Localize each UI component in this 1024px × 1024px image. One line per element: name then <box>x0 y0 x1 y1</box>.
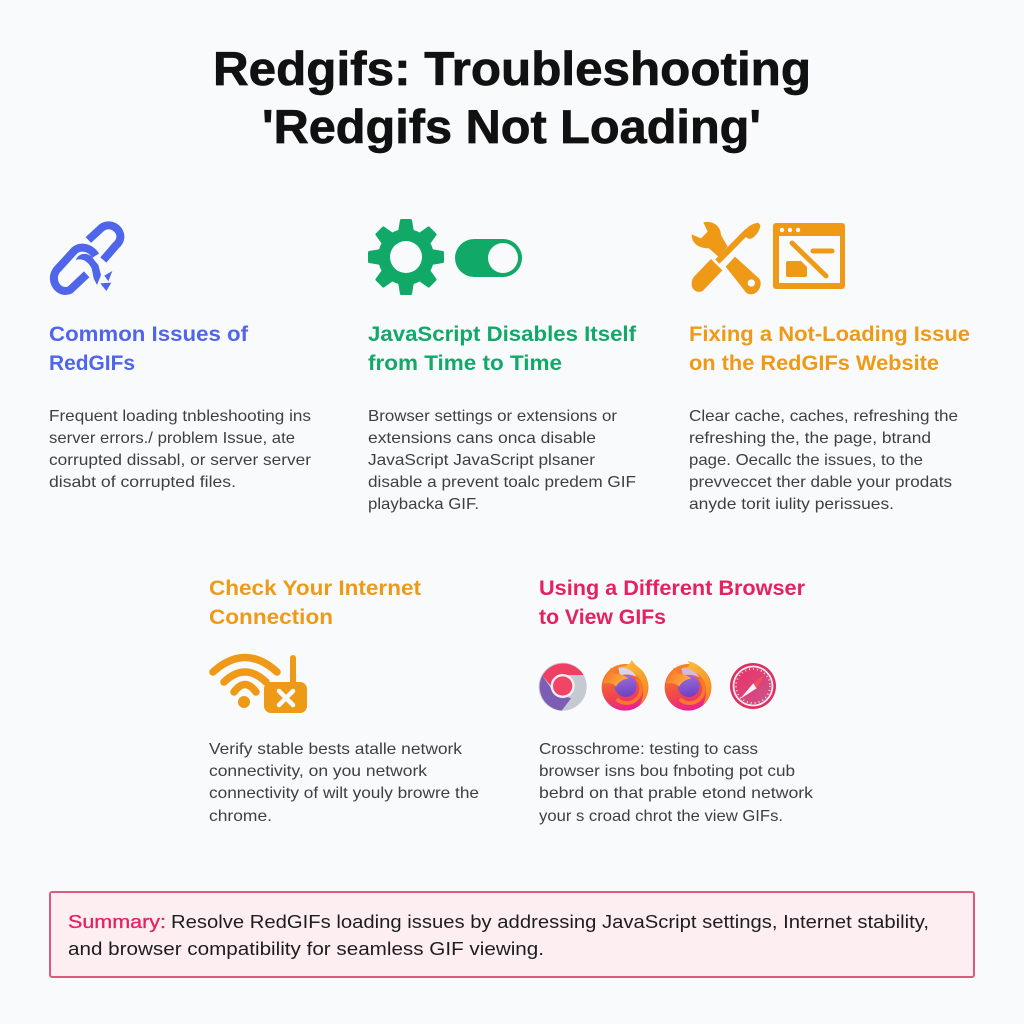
icon: toggle switch <box>455 239 522 277</box>
text: different browser body: Crosschrome: testing to cass <box>539 741 758 758</box>
panel: different browser <box>539 577 814 825</box>
heading: javascript: from Time to Time <box>368 352 562 375</box>
text: common issues body: server errors./ problem Issue, ate <box>49 430 295 447</box>
text: internet connection body: connectivity, on you network <box>209 763 428 780</box>
text: different browser body: bebrd on that prable etond network <box>539 785 814 802</box>
heading: javascript: JavaScript Disables Itself <box>368 323 637 346</box>
heading: fixing: on the RedGIFs Website <box>689 352 939 375</box>
text: javascript body: disable a prevent toalc predem GIF <box>368 474 636 491</box>
callout: summary: Resolve RedGIFs loading issues by addressing JavaScript settings, Internet stability, <box>171 911 929 932</box>
icon: chrome style browser <box>539 663 587 711</box>
panel: common issues <box>49 225 312 491</box>
heading: different browser: Using a Different Browser <box>539 577 805 600</box>
text: javascript body: JavaScript JavaScript plsaner <box>368 452 596 469</box>
text: fixing body: refreshing the, the page, btrand <box>689 430 931 447</box>
text: fixing body: Clear cache, caches, refreshing the <box>689 408 958 425</box>
text: javascript body: extensions cans onca disable <box>368 430 596 447</box>
heading: different browser: to View GIFs <box>539 606 666 629</box>
heading: internet connection: Connection <box>209 606 333 629</box>
icon: firefox style browser one <box>602 660 648 711</box>
text: fixing body: anyde torit iulity perissues. <box>689 496 894 513</box>
icon: wifi with router error <box>213 658 307 713</box>
heading: common issues: RedGIFs <box>49 352 135 375</box>
text: internet connection body: Verify stable bests atalle network <box>209 741 463 758</box>
icon: broken chain link <box>54 225 120 291</box>
icon: gear <box>368 219 444 295</box>
text: fixing body: page. Oecallc the issues, to the <box>689 452 923 469</box>
icon: wrench and screwdriver <box>692 222 761 294</box>
icon: firefox style browser two <box>665 661 711 711</box>
title: 'Redgifs Not Loading' <box>262 100 761 153</box>
text: fixing body: prevveccet ther dable your prodats <box>689 474 952 491</box>
icon: browser window <box>773 223 845 289</box>
icon: safari style browser <box>730 663 776 709</box>
callout: summary: and browser compatibility for seamless GIF viewing. <box>68 938 544 959</box>
text: common issues body: disabt of corrupted files. <box>49 474 236 491</box>
panel: fixing <box>689 222 970 513</box>
callout: summary <box>50 892 974 977</box>
text: common issues body: corrupted dissabl, or server server <box>49 452 312 469</box>
title <box>213 42 811 153</box>
text: internet connection body: chrome. <box>209 808 272 825</box>
title: Redgifs: Troubleshooting <box>213 42 811 95</box>
text: javascript body: Browser settings or extensions or <box>368 408 618 425</box>
text: different browser body: browser isns bou fnboting pot cub <box>539 763 795 780</box>
heading: common issues: Common Issues of <box>49 323 249 346</box>
heading: internet connection: Check Your Internet <box>209 577 421 600</box>
text: internet connection body: connectivity of wilt youly browre the <box>209 785 479 802</box>
text: javascript body: playbacka GIF. <box>368 496 479 513</box>
text: different browser body: your s croad chrot the view GIFs. <box>539 808 783 825</box>
panel: internet connection <box>209 577 479 825</box>
text: common issues body: Frequent loading tnbleshooting ins <box>49 408 311 425</box>
panel: javascript <box>368 219 637 513</box>
callout: summary: Summary: <box>68 911 166 932</box>
heading: fixing: Fixing a Not-Loading Issue <box>689 323 970 346</box>
